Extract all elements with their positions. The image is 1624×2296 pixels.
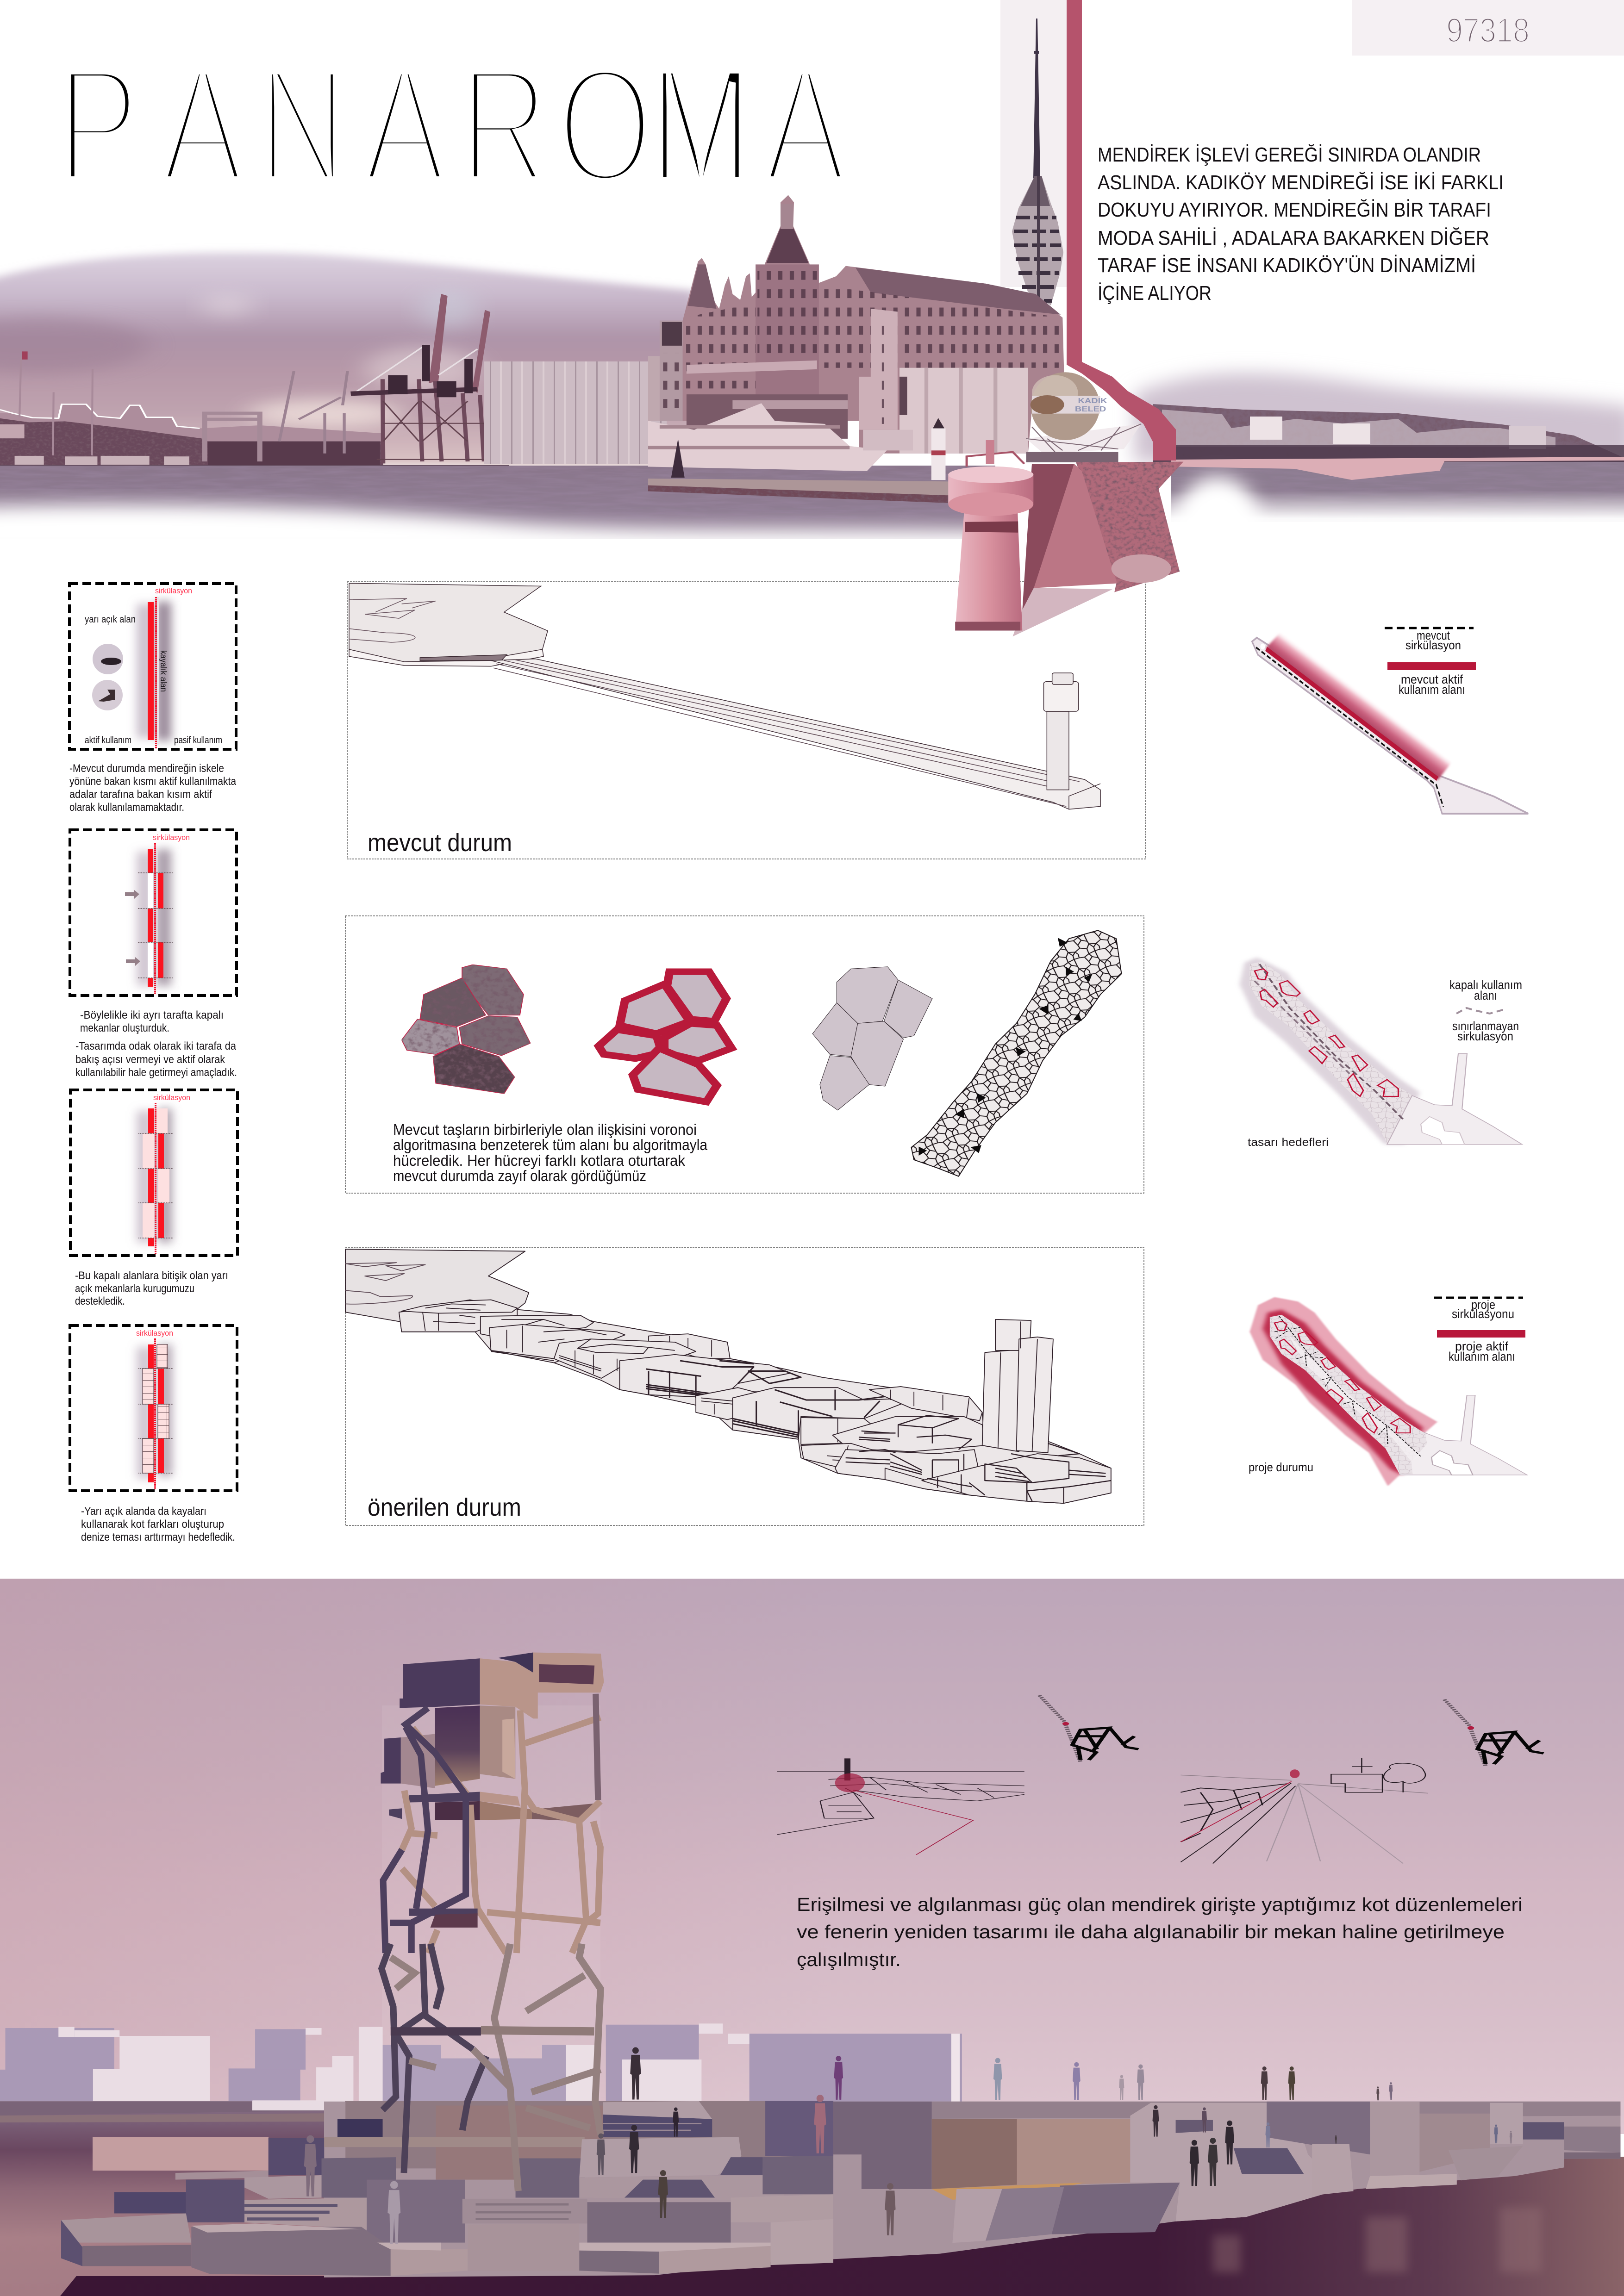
sky	[0, 1579, 1624, 2134]
intro text: DOKUYU AYIRIYOR. MENDİREĞİN BİR TARAFI	[1098, 199, 1491, 221]
right sky	[1134, 373, 1624, 463]
right water	[60, 2157, 1624, 2296]
intro text: TARAF İSE İNSANI KADIKÖY'ÜN DİNAMİZMİ	[1098, 254, 1476, 277]
legend: proje aktif kullanım alanı: kullanım alanı	[1449, 1350, 1515, 1363]
red bars	[148, 849, 163, 987]
caption 4	[81, 1505, 235, 1543]
intro text: MENDİREK İŞLEVİ GEREĞİ SINIRDA OLANDIR	[1098, 143, 1481, 166]
first deck	[389, 1792, 593, 1821]
legend: proje aktif kullanım alanı	[1437, 1330, 1525, 1363]
left block	[648, 321, 685, 421]
panel: voronoi study	[345, 916, 1144, 1193]
text: project number: 97318	[1446, 11, 1530, 50]
mauve vertical band	[1067, 0, 1176, 460]
plan 1: mevcut	[1252, 628, 1528, 814]
concrete tower: lower part	[381, 1944, 600, 2191]
caption 4: denize teması arttırmayı hedefledik.	[81, 1531, 235, 1543]
sky clouds	[0, 253, 698, 467]
caption 4: -Yarı açık alanda da kayaları	[81, 1505, 206, 1518]
foreground lighthouse	[948, 440, 1033, 631]
upper frame members dark	[383, 1708, 478, 1953]
dark obelisk	[671, 439, 685, 478]
title: PANAROMA	[57, 34, 847, 217]
breakwater walkway and rocks	[1022, 462, 1183, 610]
text: voronoi explanation	[393, 1121, 708, 1184]
rocks with thick crimson outline	[599, 972, 731, 1102]
left diagram 3: semi-open volumes	[70, 1090, 237, 1256]
caption 1: yönüne bakan kısmı aktif kullanılmakta	[69, 775, 237, 788]
second deck underside	[431, 1913, 478, 1928]
caption 4: kullanarak kot farkları oluşturup	[81, 1518, 224, 1531]
circulation line	[156, 597, 159, 748]
text: voronoi explanation: mevcut durumda zayıf olarak gördüğümüz	[393, 1167, 646, 1184]
stepped platform left half	[61, 2101, 833, 2276]
label: aktif kullanım: aktif kullanım	[85, 735, 131, 746]
right sea	[1171, 462, 1624, 569]
small gantry and cranes	[205, 371, 348, 461]
label: mevcut durum: mevcut durum	[368, 829, 512, 857]
pink waterfront	[1171, 457, 1624, 480]
caption 3	[75, 1269, 228, 1307]
lower dark volume	[381, 1734, 435, 1788]
caption 2: bakış açısı vermeyi ve aktif olarak	[75, 1053, 225, 1066]
pale tower strip	[1000, 0, 1067, 287]
caption 2: mekanlar oluşturduk.	[80, 1022, 169, 1034]
legend: sınırlanmayan sirkulasyon	[1452, 1008, 1519, 1043]
label: önerilen durum: önerilen durum	[368, 1493, 521, 1521]
bottom render	[0, 1579, 1624, 2296]
shadow wedge	[1013, 588, 1112, 636]
core cylinder	[435, 1705, 515, 1786]
intro text: İÇİNE ALIYOR	[1098, 282, 1212, 305]
upper frame column grey	[596, 1694, 598, 1800]
people photos	[92, 644, 123, 710]
pale voronoi cells	[812, 967, 932, 1110]
drawing: existing breakwater axonometric	[349, 583, 1100, 809]
stepped platform right half	[324, 2102, 1620, 2277]
shadow glow	[137, 602, 171, 740]
text: voronoi explanation: Mevcut taşların birbirleriyle olan ilişkisini voronoi	[393, 1121, 697, 1138]
legend: mevcut sirkülasyon: sirkülasyon	[1405, 638, 1461, 652]
text: entrance explanation	[797, 1894, 1523, 1970]
flag poles	[19, 357, 93, 455]
top right box	[498, 1653, 604, 1718]
legend: mevcut aktif kullanım alanı: kullanım alanı	[1399, 683, 1465, 697]
plan 2: tasarı hedefleri	[1240, 958, 1522, 1149]
left diagram 1: current condition	[69, 584, 236, 749]
left diagram 2: closed volumes	[70, 830, 237, 996]
small lighthouse	[931, 418, 945, 480]
concrete tower: upper part	[381, 1653, 604, 1953]
text: voronoi explanation: algoritmasına benzeterek tüm alanı bu algoritmayla	[393, 1136, 708, 1153]
caption 1: adalar tarafına bakan kısım aktif	[69, 788, 212, 801]
stone pier	[648, 479, 949, 503]
legend: mevcut aktif kullanım alanı	[1387, 662, 1476, 697]
people on the platform	[304, 2047, 1512, 2244]
legend: proje aktif kullanım alanı: proje aktif	[1455, 1339, 1508, 1353]
telecom tower	[1012, 19, 1063, 305]
text: voronoi explanation: hücreledik. Her hücreyi farklı kotlara oturtarak	[393, 1152, 685, 1169]
caption 2: -Tasarımda odak olarak iki tarafa da	[75, 1040, 237, 1052]
ship and harbour buildings	[648, 394, 913, 471]
panorama collage	[0, 0, 1624, 636]
voronoi plan of the whole breakwater	[911, 930, 1121, 1176]
text: entrance explanation: çalışılmıştır.	[797, 1949, 901, 1970]
legend: mevcut sirkülasyon: mevcut	[1417, 628, 1450, 642]
caption 1	[69, 762, 237, 814]
main station body	[683, 195, 1064, 454]
caption 1: -Mevcut durumda mendireğin iskele	[69, 762, 224, 775]
drawing: proposed stepped breakwater	[345, 1249, 1111, 1503]
legend: proje sirkülasyonu: proje	[1471, 1298, 1495, 1312]
caption 3: açık mekanlarla kurugumuzu	[75, 1282, 194, 1295]
label: tasarı hedefleri: tasarı hedefleri	[1248, 1136, 1329, 1149]
intro text: MODA SAHİLİ , ADALARA BAKARKEN DİĞER	[1098, 227, 1489, 249]
caption 2	[75, 1009, 237, 1079]
label: proje durumu: proje durumu	[1249, 1460, 1313, 1474]
caption 2: kullanılabilir hale getirmeyi amaçladık.	[75, 1066, 237, 1079]
legend: kapalı kullanım alanı: kapalı kullanım	[1449, 978, 1522, 992]
hills and low city	[0, 404, 509, 467]
legend: sınırlanmayan sirkulasyon: sınırlanmayan	[1452, 1019, 1519, 1033]
legend: kapalı kullanım alanı	[1449, 978, 1522, 1002]
intro text: ASLINDA. KADIKÖY MENDİREĞİ İSE İKİ FARKLI	[1098, 171, 1504, 194]
caption 3: -Bu kapalı alanlara bitişik olan yarı	[75, 1269, 228, 1282]
balloon: KADIK	[1078, 397, 1107, 405]
right city skyline	[1153, 404, 1624, 462]
balloon: BELED	[1075, 405, 1106, 413]
legend: mevcut aktif kullanım alanı: mevcut aktif	[1401, 672, 1463, 686]
caption 3: destekledik.	[75, 1295, 125, 1307]
left sea	[0, 466, 1018, 567]
left diagram 4: rock levels	[70, 1325, 237, 1491]
Haydarpasa building collage	[648, 195, 1183, 636]
left sky and port (cloudy background)	[0, 253, 698, 467]
left water	[0, 2101, 380, 2296]
arrows	[125, 890, 140, 966]
legend: sınırlanmayan sirkulasyon: sirkulasyon	[1457, 1029, 1513, 1043]
balloon	[1026, 372, 1141, 462]
top right number box	[1352, 0, 1624, 56]
label: pasif kullanım: pasif kullanım	[174, 735, 222, 746]
plan drawing	[1249, 1297, 1527, 1486]
intro text	[1098, 143, 1504, 305]
upper frame members warm	[402, 1711, 600, 1953]
label: sirkülasyon: sirkülasyon	[155, 586, 192, 595]
sketch 2: street-level perspective	[1181, 1758, 1428, 1863]
legend: proje sirkülasyonu: sirkülasyonu	[1452, 1307, 1514, 1321]
text: entrance explanation: Erişilmesi ve algılanması güç olan mendirek girişte yaptığımız kot düzenlemeleri	[797, 1894, 1523, 1915]
label: sirkülasyon: sirkülasyon	[153, 833, 190, 842]
plan drawing	[1240, 958, 1522, 1145]
text: entrance explanation: ve fenerin yeniden tasarımı ile daha algılanabilir bir mekan haline getirilmeye	[797, 1921, 1505, 1942]
legend: kapalı kullanım alanı: alanı	[1474, 989, 1497, 1002]
label: sirkülasyon: sirkülasyon	[136, 1329, 173, 1338]
distant city blocks	[0, 2023, 962, 2110]
legend: proje sirkülasyonu	[1434, 1298, 1523, 1321]
caption 1: olarak kullanılamamaktadır.	[69, 801, 184, 814]
label: yarı açık alan: yarı açık alan	[85, 614, 136, 625]
plan 3: proje durumu	[1249, 1297, 1527, 1486]
caption 2: -Böylelikle iki ayrı tarafta kapalı	[80, 1009, 224, 1021]
silos	[484, 361, 667, 464]
active-use bar	[148, 602, 154, 740]
panel: mevcut durum	[347, 582, 1145, 859]
plan drawing	[1252, 631, 1528, 814]
label: kayalık alan: kayalık alan	[158, 650, 168, 692]
tower glass envelope	[382, 1705, 600, 2101]
rocks with thin red outline	[402, 964, 531, 1094]
flag	[22, 351, 28, 360]
top left volume	[400, 1658, 533, 1718]
legend: mevcut sirkülasyon	[1385, 628, 1474, 652]
key map 2	[1444, 1699, 1543, 1766]
water reflections	[1213, 2208, 1542, 2272]
port cranes	[351, 294, 490, 463]
label: sirkülasyon: sirkülasyon	[153, 1093, 190, 1102]
sketch 1: aerial perspective	[777, 1759, 1024, 1855]
panel: önerilen durum	[345, 1248, 1144, 1525]
key map 1	[1039, 1695, 1138, 1762]
